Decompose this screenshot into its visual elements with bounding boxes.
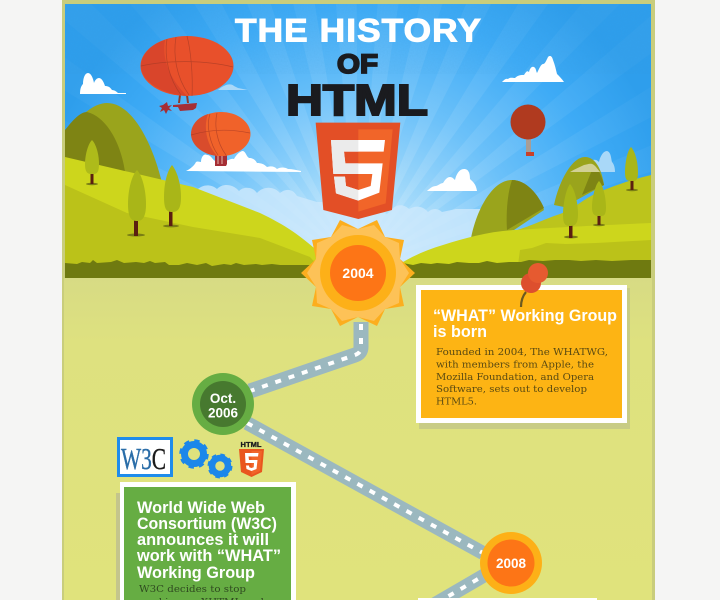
heading: of: OF bbox=[337, 49, 378, 79]
date label: 2006 bbox=[208, 406, 239, 420]
panel body text: with members from Apple, the bbox=[436, 360, 594, 370]
heading: the history: THE HISTORY bbox=[235, 12, 482, 48]
icon: tree 5 bbox=[592, 181, 606, 226]
icon: W3C logo: W3C bbox=[121, 441, 166, 476]
icon: tree 1 bbox=[85, 140, 99, 185]
panel heading bbox=[136, 499, 281, 582]
panel heading: is born bbox=[433, 323, 487, 341]
horizon clouds bbox=[198, 185, 480, 262]
panel heading: World Wide Web bbox=[137, 499, 265, 517]
icon: small HTML5 badge: HTML bbox=[240, 440, 262, 449]
icon: push pin bbox=[521, 263, 548, 307]
icon: top right white cloud bbox=[502, 56, 564, 82]
panel: sky header scene bbox=[65, 4, 651, 278]
icon: HTML5 shield bbox=[316, 123, 400, 219]
panel heading: Working Group bbox=[137, 564, 255, 582]
year label: 2004 bbox=[342, 265, 374, 281]
icon: middle right white cloud bbox=[427, 169, 477, 191]
title bbox=[235, 12, 482, 125]
marker: Oct. 2006 bbox=[192, 373, 254, 435]
year label: 2008 bbox=[496, 556, 527, 571]
date label: Oct. bbox=[210, 391, 236, 406]
panel body text bbox=[139, 584, 264, 600]
icon: far cloud left bbox=[218, 84, 248, 90]
panel: W3C announcement bbox=[116, 482, 296, 600]
icon: small HTML5 badge bbox=[239, 440, 264, 477]
icon: tree 2 bbox=[127, 170, 146, 236]
icon: left white cloud bbox=[80, 73, 126, 94]
panel body text: Software, sets out to develop bbox=[436, 384, 587, 395]
panel body text: Mozilla Foundation, and Opera bbox=[436, 372, 594, 383]
icon: white cloud under balloon bbox=[186, 151, 301, 172]
panel: 2008 card top edge bbox=[418, 598, 597, 600]
panel body text: Founded in 2004, The WHATWG, bbox=[436, 347, 608, 358]
icon: tree 4 bbox=[563, 184, 578, 238]
icon: small hot air balloon bbox=[510, 104, 546, 156]
right hills bbox=[471, 157, 604, 238]
panel heading: “WHAT” Working Group bbox=[433, 307, 617, 325]
panel heading: announces it will bbox=[137, 531, 269, 549]
panel heading: work with “WHAT” bbox=[136, 547, 281, 565]
timeline background bbox=[64, 278, 652, 600]
panel: WHAT working group bbox=[416, 285, 630, 429]
panel body text: W3C decides to stop bbox=[139, 584, 246, 595]
heading: html: HTML bbox=[286, 76, 428, 125]
panel body text: HTML5. bbox=[436, 396, 477, 408]
sky with sun rays bbox=[65, 4, 651, 262]
panel heading bbox=[433, 307, 617, 341]
marker: 2008 bbox=[480, 532, 542, 594]
icon: blue gears bbox=[182, 442, 230, 476]
left meadow bbox=[65, 157, 326, 278]
icon: faint cloud right bbox=[593, 151, 615, 172]
icon: tree 6 bbox=[625, 147, 638, 191]
panel heading: Consortium (W3C) bbox=[137, 515, 277, 533]
road: timeline path bbox=[247, 322, 490, 600]
panel body text bbox=[436, 347, 608, 408]
icon: red airship large bbox=[140, 36, 234, 114]
right meadow bbox=[403, 175, 651, 278]
icon: sun 2004 marker bbox=[301, 220, 415, 326]
left hill bbox=[65, 103, 162, 183]
icon: tree 3 bbox=[163, 165, 181, 227]
icon: red airship small bbox=[191, 112, 250, 166]
trees bbox=[85, 140, 638, 238]
